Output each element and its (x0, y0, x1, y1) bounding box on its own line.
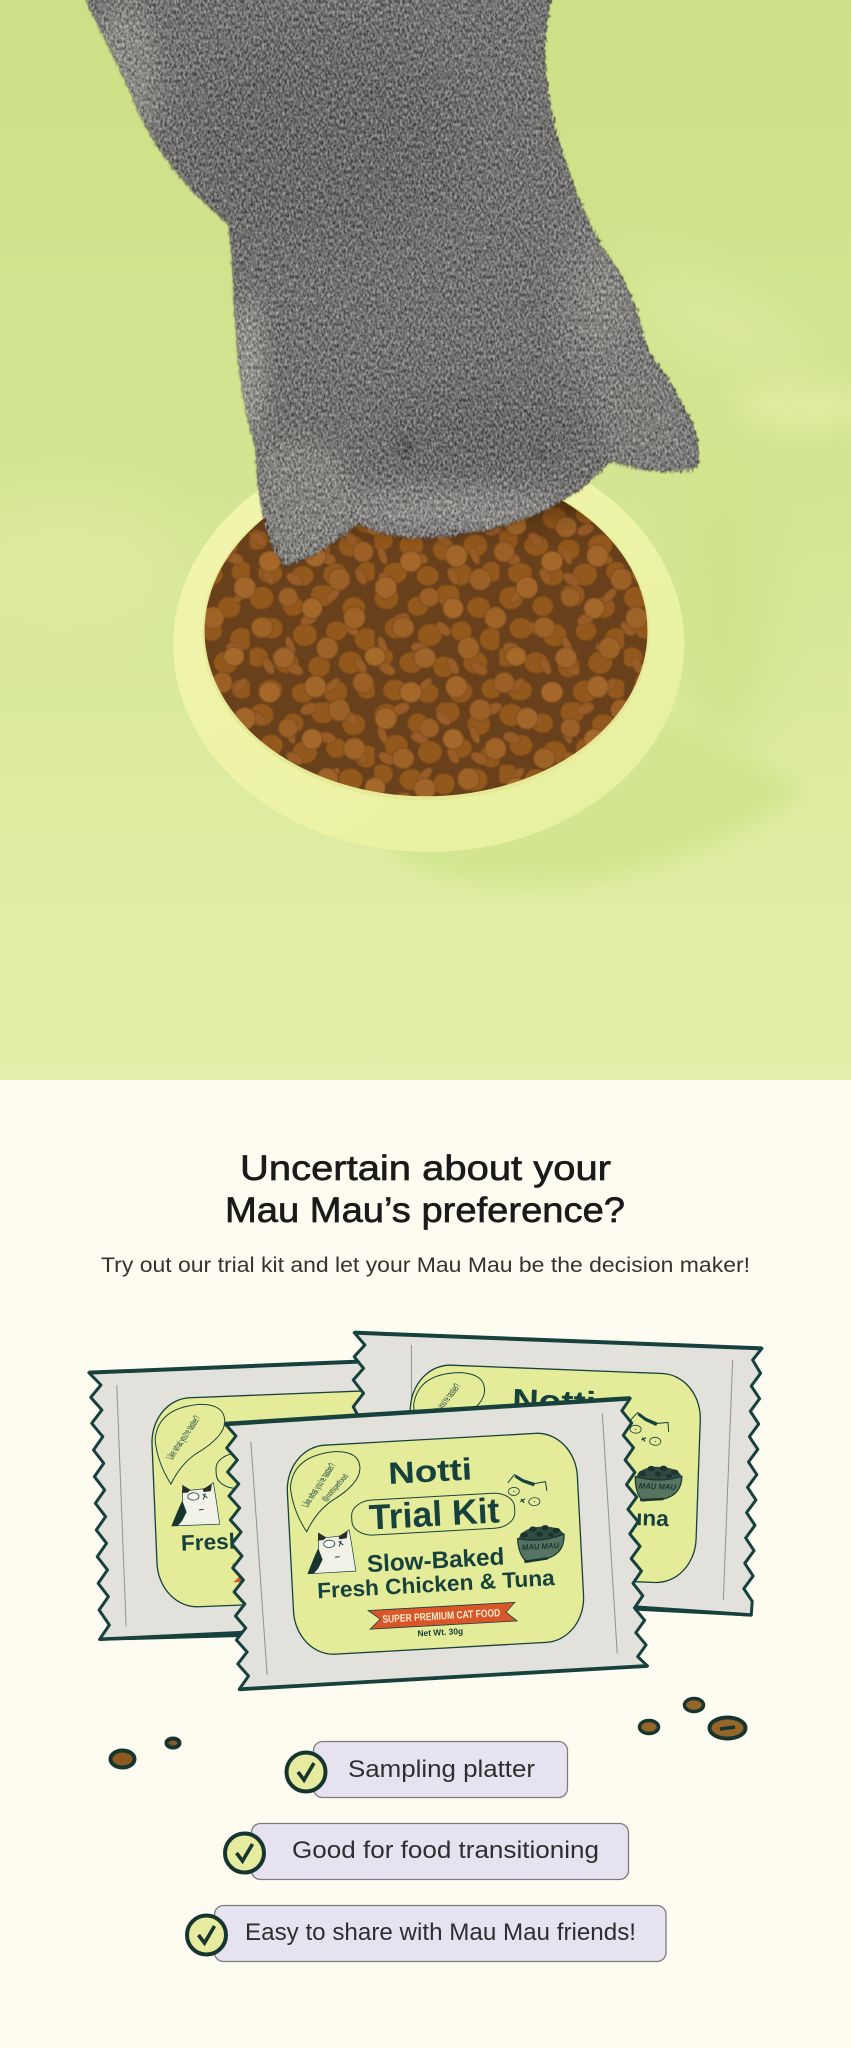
bowl (173, 483, 684, 852)
heading: Uncertain about your (240, 1149, 611, 1188)
pouch label: back right: Notti (512, 1382, 597, 1420)
speech bubble: Like what you’re tastier? (299, 1462, 339, 1509)
net weight: Net Wt. 30g (417, 1627, 463, 1639)
pouch label: back right: Fresh Chicken & Tuna (431, 1497, 670, 1531)
check icon (286, 1752, 326, 1792)
pouch label: front (285, 1431, 586, 1656)
speech bubble (289, 1450, 363, 1533)
heading (225, 1149, 625, 1230)
pouch label: back left: Fresh Chicken & Tuna (180, 1522, 420, 1556)
icon: white cat (306, 1529, 356, 1574)
benefit: sampling platter: Sampling platter (348, 1756, 535, 1783)
kibble in the bowl (204, 500, 648, 796)
benefit: food transitioning (225, 1824, 628, 1880)
heading: Mau Mau’s preference? (225, 1191, 625, 1230)
icon: cat glasses (507, 1473, 548, 1507)
icon: food bowl (517, 1524, 565, 1563)
pouch label: back right (405, 1364, 702, 1584)
benefit: sampling platter (286, 1742, 568, 1798)
brand name: Notti (387, 1451, 473, 1491)
pouch: front (225, 1398, 647, 1689)
check icon (187, 1916, 226, 1954)
kibble bits: right (640, 1698, 746, 1738)
pouch: back left (89, 1362, 449, 1639)
pouch label: back left (150, 1388, 449, 1608)
product name: Slow-Baked (366, 1544, 505, 1578)
kibble bits: left (110, 1738, 180, 1768)
benefit: share with friends: Easy to share with Mau Mau friends! (245, 1919, 636, 1946)
photo: grey cat eating from a yellow bowl (0, 0, 851, 1080)
check icon (225, 1834, 264, 1872)
trial kit pill (351, 1490, 516, 1539)
pouch label: back right: Like what you’re tastier? (421, 1382, 464, 1427)
trial kit pill: Trial Kit (368, 1491, 500, 1538)
product name (315, 1541, 556, 1603)
subheading: Try out our trial kit and let your Mau Mau be the decision maker! (101, 1253, 750, 1277)
benefit: food transitioning: Good for food transitioning (292, 1837, 599, 1864)
speech bubble: @nottipetfood (319, 1473, 351, 1503)
illustration: three trial kit pouches (89, 1333, 762, 1689)
pouch: back right (353, 1333, 762, 1615)
backdrop: green surface (0, 0, 851, 1080)
product name: Fresh Chicken & Tuna (317, 1565, 556, 1603)
benefit: share with friends (187, 1906, 666, 1962)
orange banner (368, 1602, 517, 1629)
pouch label: back left: Like what you’re tastier? (164, 1414, 204, 1461)
orange banner: SUPER PREMIUM CAT FOOD (382, 1606, 500, 1625)
cat (84, 0, 701, 568)
